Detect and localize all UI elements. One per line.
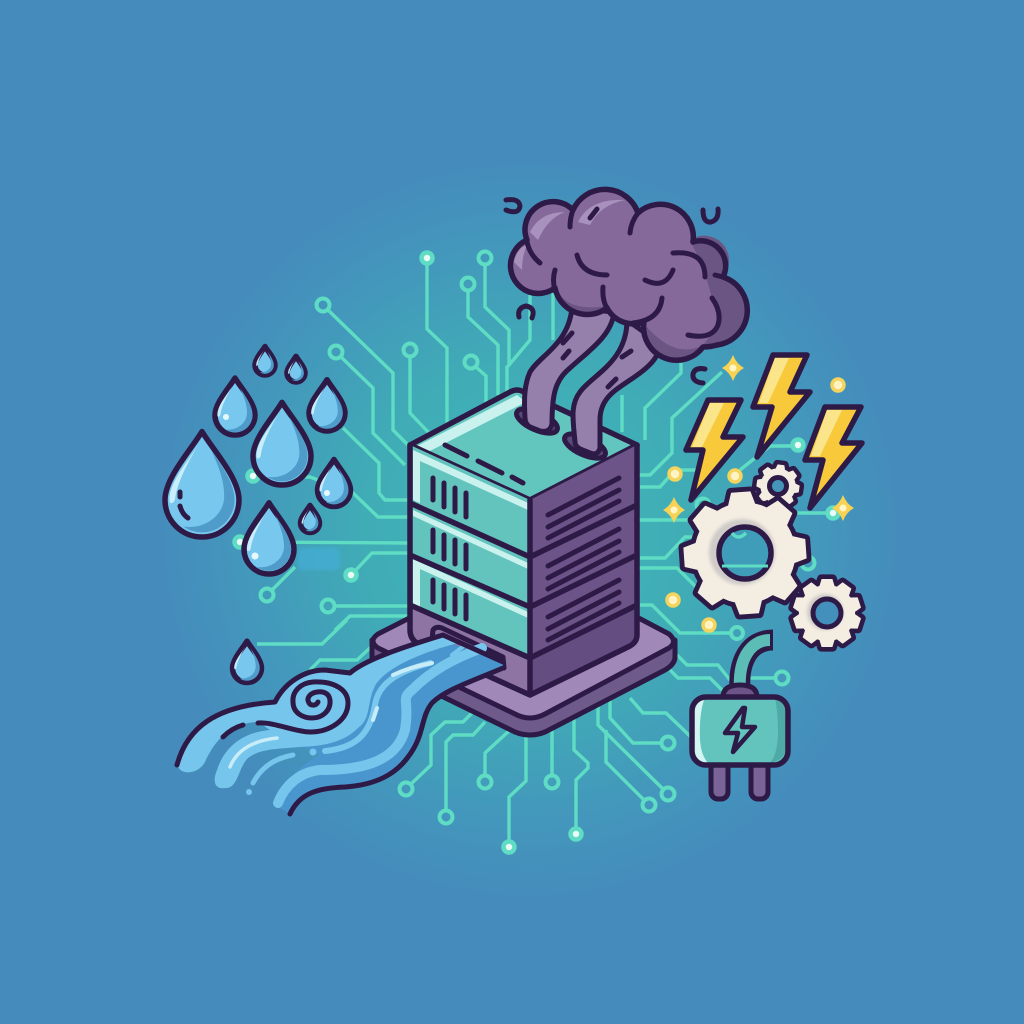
server stack xyxy=(410,390,637,695)
cloud highlights xyxy=(514,200,625,270)
drop above river xyxy=(232,641,262,682)
server front xyxy=(410,445,530,695)
server outline xyxy=(410,445,637,695)
cloud back lobes xyxy=(690,236,747,345)
plug prongs xyxy=(711,762,768,799)
medium gear xyxy=(792,579,862,647)
drop tiny top right xyxy=(287,356,305,382)
stream ripples xyxy=(230,645,482,803)
stream outlines and swirl xyxy=(177,635,503,765)
right vents xyxy=(548,478,619,640)
plug cable xyxy=(740,640,773,690)
drop large left xyxy=(165,432,239,537)
drop lower xyxy=(244,503,294,574)
circuit traces xyxy=(234,252,838,852)
lightning bolts xyxy=(686,355,862,508)
water stream xyxy=(177,635,503,814)
server top face xyxy=(410,390,637,500)
small gear xyxy=(754,462,802,510)
bolt top xyxy=(753,355,810,457)
bolt left xyxy=(686,400,743,500)
gears xyxy=(680,462,862,647)
smoke wisps xyxy=(506,200,718,383)
drop upper right xyxy=(309,380,345,431)
plug bolt icon xyxy=(725,708,755,752)
drop tiny top left xyxy=(255,346,275,375)
blue smear xyxy=(298,548,340,570)
cloud shadows xyxy=(558,292,703,358)
cloud inner lines xyxy=(527,209,723,336)
front vents xyxy=(433,478,466,619)
pipe slots xyxy=(513,404,561,438)
traces: top xyxy=(316,252,681,465)
drop center xyxy=(253,402,311,485)
cloud outline xyxy=(510,189,747,360)
plate top xyxy=(373,561,674,718)
large gear xyxy=(680,488,810,618)
stream body xyxy=(275,640,503,814)
cloud fill xyxy=(510,189,747,360)
plug body xyxy=(692,697,788,765)
traces: right xyxy=(638,372,838,693)
base plate xyxy=(372,561,675,735)
stream light band xyxy=(178,637,458,788)
traces: bottom xyxy=(400,698,692,852)
water drops group xyxy=(165,346,350,682)
drop tiny lower xyxy=(300,505,320,532)
smoke pipes xyxy=(513,308,658,463)
pipe right xyxy=(573,320,658,454)
power plug xyxy=(692,640,788,799)
drop right xyxy=(318,459,350,506)
drop glints xyxy=(180,414,330,560)
smoke cloud xyxy=(506,189,747,383)
sparkles and energy dots xyxy=(663,355,854,631)
traces: left xyxy=(234,428,410,670)
front highlights xyxy=(413,450,528,618)
pipe marks xyxy=(563,333,631,387)
drop upper left xyxy=(215,378,255,435)
plate side xyxy=(372,640,675,735)
outlet slot xyxy=(432,627,504,668)
bolt right xyxy=(805,407,862,508)
plug cap xyxy=(723,685,757,697)
server right side xyxy=(530,445,637,695)
pipe left xyxy=(525,308,614,431)
